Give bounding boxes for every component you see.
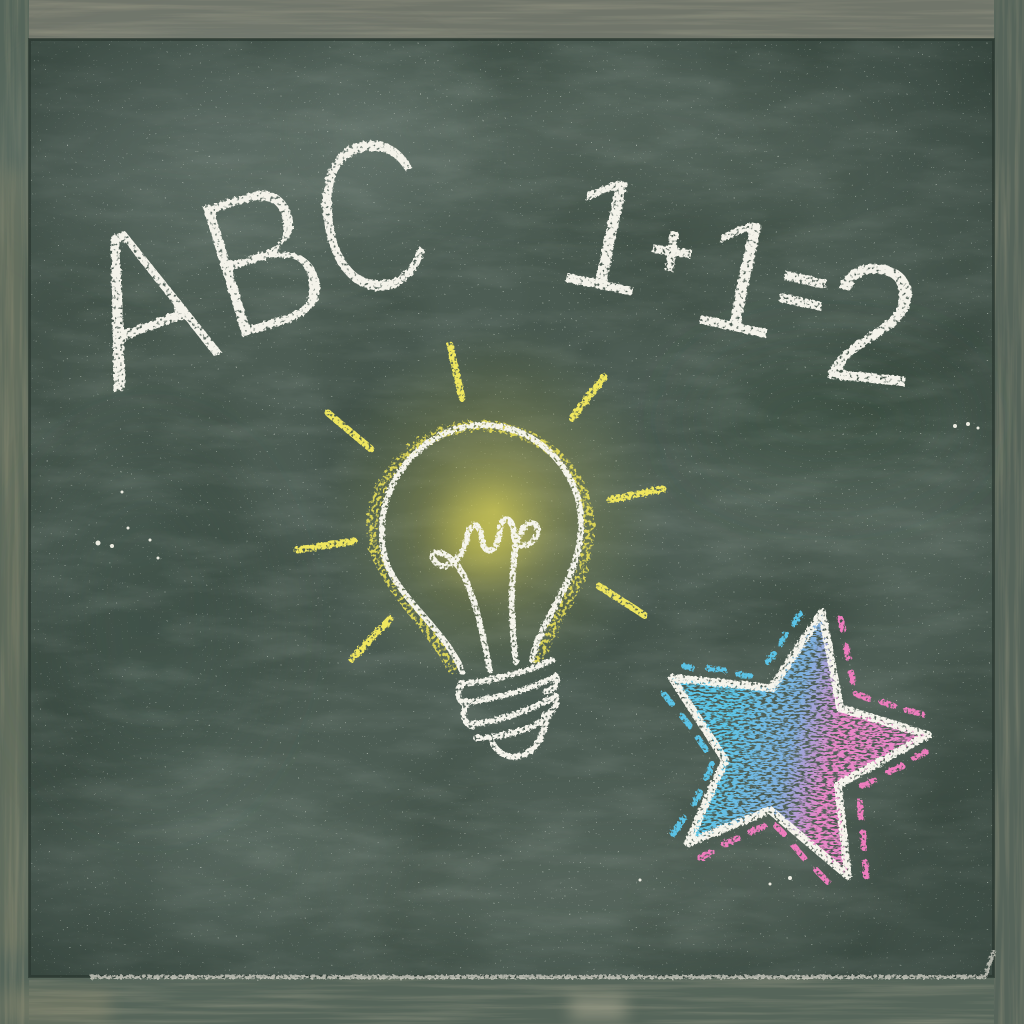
pink dashed outline xyxy=(700,618,926,882)
filament glow xyxy=(443,497,527,573)
icon: glowing light bulb xyxy=(297,325,670,757)
yellow chalk halo around bulb xyxy=(372,426,589,668)
heading: ABC xyxy=(41,86,447,443)
blue dashed outline xyxy=(664,614,800,834)
equation: 1+1=2: 1 xyxy=(678,177,806,376)
bulb glow xyxy=(320,325,670,695)
star colour fill xyxy=(672,612,928,876)
equation: 1+1=2: 2 xyxy=(814,223,931,427)
heading: ABC: B xyxy=(171,130,355,388)
bulb outline and filament xyxy=(382,425,581,757)
icon: chalk star xyxy=(664,612,928,882)
equation operators: plus and equals: + xyxy=(643,204,700,297)
heading: ABC: A xyxy=(41,163,246,443)
white star outline xyxy=(672,612,928,876)
equation operators: plus and equals xyxy=(643,204,837,341)
light rays xyxy=(297,345,663,659)
equation operators: plus and equals: = xyxy=(769,239,837,341)
heading: ABC: C xyxy=(295,86,447,348)
equation: 1+1=2: 1 xyxy=(544,135,672,334)
equation: 1+1=2 xyxy=(544,135,931,427)
